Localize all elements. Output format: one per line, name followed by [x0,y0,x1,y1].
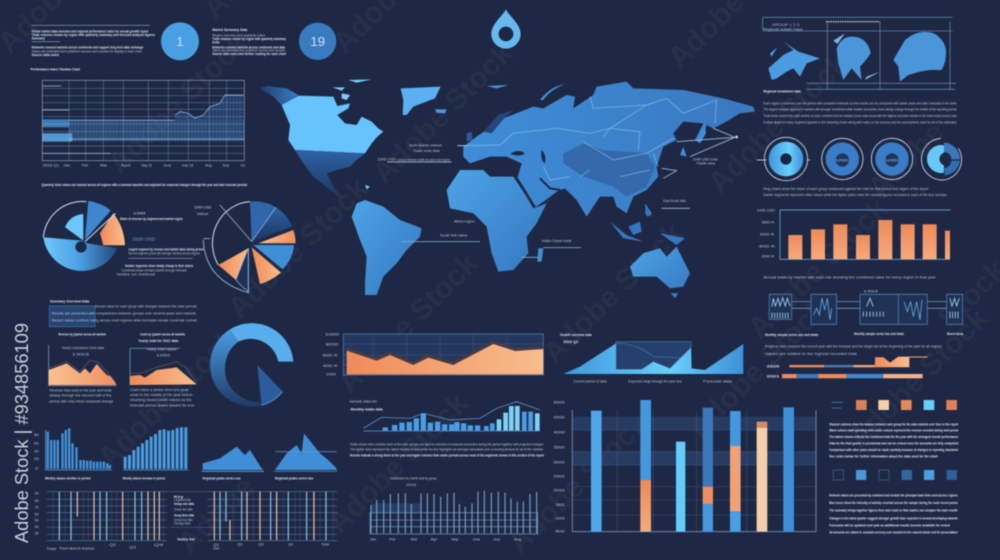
text block: intro right: Networks connect markets across continents and data [212,45,285,49]
text block: pie notes: 1929 USD [132,236,156,241]
area chart: right orange: returning toward lower values as the [130,398,192,402]
icon: circle badge 1: 1 [176,34,184,49]
map region: north america [260,79,383,199]
text block: pie notes: Second segment grows with stronger demand across regions [128,251,200,255]
grid chart: left lines: 30 [35,531,39,535]
text block: pie notes: Combined share remains stable through forecast [122,269,187,273]
watermarks: Adobe Stock [702,47,855,200]
text block: donut notes: Darker segments represent older values while the lighter parts mark the newest figures recorded in each of the four surveys [763,193,947,197]
grid chart: left lines: 50 [35,519,39,523]
line chart: grid timeline [42,80,246,168]
stacked bar chart [553,400,816,534]
grid chart: left lines: Period values for all groups [59,546,95,550]
watermarks: Adobe Stock [842,302,995,455]
line chart: grid timeline: Oc [241,164,246,168]
text block: intro left: Networks connect markets across continents and support long term data exchange [32,46,143,50]
bar chart: right blue [123,427,188,480]
grid chart: right lines: Sum [213,546,220,550]
area chart: wide orange: 1000 [325,332,339,336]
text block: legend notes two: Blue tones show the intensity of activity recorded across the sample during the most recent period [829,501,958,505]
area chart: right orange: Costs follow a similar trend and peak [130,388,189,392]
watermarks: Adobe Stock [322,387,475,540]
area chart: left orange: steady through the second half of the [49,394,112,398]
text block: notes: Progress bars compare the current year with the forecast and the target set at the beginning of the plan for all regions [765,345,942,349]
area chart: right orange: Yearly chart values [147,348,177,352]
line chart: grid timeline: Aug [205,164,212,168]
icon: circle badge 1 [161,22,199,60]
panel: bottom right [553,400,959,534]
area chart: wide blue: Expected range through the year end [628,379,682,383]
caption: Quarterly index values are tracked across all regions with a common baseline and adjusted for seasonal changes through the year and later forecast periods [42,183,247,187]
donut 2: USD [836,158,850,162]
watermarks: Adobe Stock [537,217,690,370]
stacked bar chart: 2000 [553,488,565,492]
map labels and callout arrows: Linked network traffic by year and region [397,158,450,162]
icon: location pin [491,9,521,49]
mini charts: five sparkline boxes [765,289,964,337]
map crops: three regions: GROUP 1 2 3 [772,22,800,27]
watermarks: Adobe Stock [682,292,835,445]
watermarks: Adobe Stock [92,322,245,475]
legend: cool squares [833,470,957,480]
area chart: left orange: Yearly comparison chart data [62,346,104,350]
text block: legend notes one: Warm colours mark spending while cooler colours represent the revenue recorded during each period [829,429,958,433]
text block: center notes: Totals shown here combine each of the main groups and give an overview of seasonal movement during the period together with projected changes [350,442,544,446]
text block: intro right: Values are estimated from published sources and rounded [212,49,285,53]
grid chart: right lines [207,492,337,550]
area chart: right orange: 1950 [156,354,170,358]
bar chart: center small: Monthly totals data [351,408,383,412]
line chart: grid timeline: 2018 Q1 [43,164,60,168]
text block: donut notes: Ring charts show the share of each group measured against the total for that period and region of the report [763,187,928,191]
watermarks: Adobe Stock [502,407,655,560]
area chart: blue mountains left [202,447,264,480]
text block: grid legend: Group three data [174,514,194,518]
area chart: left orange: Revenue rises early in the year and holds [49,389,112,393]
text block: paragraph: Each region is reviewed over the period with consistent methods so that results can be compared with earlier years and later forecasts in the table [763,101,957,105]
bar chart: left blue: Weekly values decline in period [45,476,91,480]
text block: paragraph: Trade flows connect the main centres on each continent and the shaded zones mark areas with the highest recorded volume in the most recent survey data [763,114,957,118]
map region: southeast asia islands [610,205,685,245]
grid chart: left lines: 60 [35,512,39,516]
map: world [260,79,755,298]
line chart: grid timeline: May 18 [142,164,152,168]
map crops: three regions [763,17,956,94]
area chart: right orange: Yearly total for 2021 data [138,339,178,343]
donut charts: four rings [757,137,962,181]
text block: legend notes one: Stacked columns show the balance between each group for the main markets over time in this report [829,422,959,426]
bar chart: center small: Sample data set [349,400,377,404]
watermarks: Adobe Stock [222,172,375,325]
pie chart: right: 1999 USD [194,204,211,209]
area chart: wide orange: 400 K [323,364,339,368]
bar chart: orange bars: 600 K [760,232,776,236]
line chart: grid timeline: April [121,164,131,168]
line chart: grid timeline: Sep [223,164,229,168]
text block: legend notes two: All amounts are stated in constant currency and rounded to the nearest whole unit for presentation [829,530,958,534]
stacked bar chart: 4000 [553,431,565,435]
text block: pie notes [117,211,203,276]
watermarks: Adobe Stock [742,192,895,345]
grid chart: right lines: Q2 [237,542,243,546]
stacked bar chart: 500 [555,530,565,534]
line chart: grid timeline: Feb [82,164,88,168]
text block: pie notes: Smaller segments show steady change in their shares [125,264,193,268]
text box: Recent values continue rising across most regions while forecasts remain moderate overall [52,318,197,322]
area chart: right orange: close to the middle of the year before [130,393,193,397]
map labels and callout arrows: North Atlantic network [409,144,442,148]
legend: warm squares [832,400,957,410]
text block: grid legend: Key [174,495,184,499]
donut 1 [757,137,810,181]
map labels and callout arrows: South link value [440,234,467,238]
mini charts: five sparkline boxes: Monthly sample series two and totals [854,332,904,336]
text block: legend notes one: Data for the final quarter is provisional and can be revised once the accounts are fully completed [829,441,958,445]
panel: right column [757,17,964,379]
grid chart: left lines: Q3 [129,546,136,550]
stacked bar chart: 4500 [553,415,565,419]
text block: grid legend: Notes list [177,538,196,542]
spike chart: 2018 [406,483,416,487]
text block: center notes: Results indicate a strong finish to the year and higher volumes than earlier periods across most of the segments shown in this section of the report [350,453,545,457]
text block: center notes: The lighter bars represent the latest months of data while the line highlights an average calculated over a moving window for all of the markets [350,448,544,452]
bar chart: left blue: 20 [34,457,39,461]
text block: donut notes [763,187,947,197]
area chart: wide orange: 200 [326,373,336,377]
text box [49,299,197,327]
progress bars: 2020 [767,364,780,368]
grid chart: left lines: 90 [35,492,39,496]
map region: iceland and svalbard [435,85,508,113]
chart label: Performance Index Timeline Chart [31,67,81,71]
line chart: grid timeline: Jan [63,164,70,168]
text block: pie notes: Largest segment by revenue and market value during period [128,247,203,251]
text block: intro left: Values are estimated from published sources and rounded for display in each chart [32,50,142,54]
map labels and callout arrows: Pacific area [697,162,715,166]
spike chart: Jan [370,538,376,542]
text block: intro right: Market Summary Data [212,28,247,32]
bar chart: left blue: 0 [35,466,38,470]
mini charts: five sparkline boxes: Monthly sample series one and totals [765,333,818,337]
map crops: three regions: Regional breakdown data [763,90,801,94]
mini charts: five sparkline boxes: Series [947,332,964,336]
grid chart: left lines: 70 [35,505,39,509]
stacked bar chart: 3000 [553,460,565,464]
text block: intro right: Info [212,40,220,44]
panel: lower left [34,299,337,551]
pie chart: left [43,201,125,271]
text block: pie notes: 1999 [133,211,147,216]
stacked bar chart: 2500 [553,474,565,478]
spike chart [370,477,538,542]
map region: africa [447,170,547,272]
bar chart: orange bars: 200 K [761,255,776,259]
map labels and callout arrows: 1995 USD [377,158,396,162]
map labels and callout arrows: Africa region [454,220,475,224]
text block: legend notes one: Comparison with other years should be made carefully because of changes in reporting standards [829,448,958,452]
text block: legend notes one: See notes below for further information about the data used for the chart [829,454,938,458]
map region: australia [630,247,690,298]
map region: greenland [401,87,441,115]
area chart: wide blue: Forecast data [703,379,732,383]
text block: intro right: Region overview and quarterly notes [212,33,265,37]
area chart: wide blue: 2019 Q1 [563,340,578,344]
text block: grid legend: Group five [174,521,191,525]
donut 2 [822,138,863,180]
line chart: grid timeline: June [163,164,171,168]
watermarks: Adobe Stock [332,247,485,400]
grid chart: left lines: Total [47,547,56,551]
panel: center lower [323,332,743,542]
area chart: right orange: forecast period draws toward its end [130,403,194,407]
spike chart: Aug [514,538,521,542]
text block: pie notes: Share of revenue by segment and market region [120,217,183,221]
text block: intro left: Global market data overview and regional performance index for annual growth report [32,30,149,34]
map labels and callout arrows: 1995 USD total [693,158,718,162]
grid chart: right lines: Q4 [288,542,293,546]
mini charts: five sparkline boxes: 1994 [863,289,879,294]
area chart: left orange [49,333,117,403]
bar chart: orange bars: 400 K [759,244,777,248]
text block: legend notes two: Changes in the latest quarter suggest stronger growth than expected in several developing markets [829,516,958,520]
spike chart: July [493,538,500,542]
pie chart: right [194,201,296,293]
stacked bar chart: 1000 [555,517,565,521]
spike chart: June [473,538,480,542]
watermarks: Adobe [862,116,951,205]
area chart: right orange: Costs by Quarter across all markets [140,332,185,336]
watermarks: Adobe Stock [367,37,520,190]
bar chart: left blue [34,428,112,480]
area chart: left orange: 1993 [72,353,89,357]
text block: grid legend: Group two data [174,508,193,512]
text block: intro right: Source data notes and further reading for each chart [212,52,287,56]
text block: notes [765,345,942,356]
watermarks: Adobe Stock [497,87,650,240]
spike chart: Feb [389,538,395,542]
progress bars: 2021 [767,375,780,379]
bar chart: orange bars: 1000 USD [757,208,776,212]
grid chart: left lines: Q4 [154,543,164,547]
grid chart: right lines: Total [321,542,329,546]
area chart: blue mountains right: Regional peaks series two [275,476,313,480]
grid chart: left lines: 40 [35,525,39,529]
text block: intro right: Trade volumes shown by region with quarterly summary [212,37,286,41]
map region: madagascar [537,248,543,262]
map labels and callout arrows: Trade route links [413,149,440,153]
grid chart: right lines: Q1 [213,543,219,547]
text block: legend notes two [829,493,958,534]
text block: legend notes two: Network values are presented by continent and include the principal trade links used across regions [829,493,958,497]
bar chart: orange bars [757,208,951,259]
stacked bar chart: 5000 [553,401,565,405]
donut: large [210,323,293,407]
text box: Summary Overview Data [50,299,89,303]
donut 3 [871,138,913,180]
text block: grid legend: Group four data [174,518,193,522]
text block: intro left: Summary [32,36,45,40]
stacked bar chart: 3500 [553,446,565,450]
area chart: wide blue [560,333,743,383]
bar chart: right blue: Weekly values increase in period [123,476,165,480]
text block: paragraph [763,101,957,125]
spike chart: May [452,538,459,542]
area chart: left orange: period with only minor seasonal change [49,399,113,403]
grid chart: left lines: Q2 [109,543,116,547]
area chart: wide orange: 800 [326,342,339,346]
text block: paragraph: The largest increase appears in markets with stronger investment while smaller economies show steady change through the middle of the reporting period [763,107,957,111]
text block: intro left [32,25,155,57]
donut 3: USD [886,158,899,162]
grid chart: left lines [35,492,167,551]
text block: intro left: Source data notes [32,53,59,57]
text block: intro right [212,28,287,56]
caption: Annual totals by market with each bar showing the combined value for every region in that year [763,276,937,280]
area chart: wide orange: 600 K [323,353,339,357]
text block: notes: Values are relative to the highest recorded total [765,352,857,356]
text block: legend notes two: The summary brings together figures from each chart so that readers can compare the main results [829,508,958,512]
area chart: blue mountains left: Regional peaks series one [203,476,241,480]
area chart: wide blue: Growth overview data [560,333,592,337]
icon: circle badge 19: 19 [310,34,325,49]
watermarks: Adobe Stock [102,27,255,180]
panel: top left and pies [31,22,336,293]
map labels and callout arrows: East Route data [663,199,686,203]
area chart: left orange: Revenue by Quarter across all markets [58,333,106,337]
grid chart: right lines: Q3 [258,542,264,546]
text block: pie notes: Notes on method [117,272,155,276]
map labels and callout arrows [377,128,738,257]
text block: center notes [350,442,545,457]
map crops: three regions: Regional subset maps [763,28,803,32]
map region: eurasia [463,82,755,217]
area chart: blue mountains right [274,433,337,480]
text block: legend notes one: The tallest column reflects the combined total for the year with the strongest overall performance [829,435,958,439]
text block: legend notes two: Forecasts will be updated next year as additional results become available for review [829,523,950,527]
line chart: grid timeline: July 18 [182,164,193,168]
bar chart: left blue: 60 [34,442,39,446]
spike chart: Apr [431,538,438,542]
map labels and callout arrows: Indian Ocean trade [542,239,572,243]
donut 4 [921,138,962,180]
watermarks: Adobe [172,471,261,560]
stacked bar chart: 1500 [555,503,565,507]
map region: south america [352,200,422,295]
area chart: wide orange [323,332,543,377]
text block: grid legend: Group one data [174,502,194,506]
text box: Annual value for each group with changes between the main periods [95,304,197,308]
vertical stock label: Adobe Stock | #934856109 [12,323,32,543]
bar chart: left blue: 40 [34,450,39,454]
text block: grid legend: Legend list [174,498,191,502]
bar chart: left blue: 80 [34,433,39,437]
text block: paragraph: Further detail for every segment appears in the following charts along with notes on the sources and the assumptions used for all of the estimates [763,121,957,125]
progress bars [767,357,928,379]
bar chart: orange bars: 800 K [762,220,776,224]
text block: grid legend [167,492,207,542]
icon: circle badge 19 [299,23,336,60]
pie chart: right: Value [197,212,209,216]
line chart: grid timeline: Mar [100,164,108,168]
text box: Results are presented with comparisons between groups over several years and markets [52,312,196,316]
text block: intro left: Trade volumes shown by region with quarterly summary and forecast analysis figures [32,33,155,37]
area chart: right orange [130,332,197,407]
bar chart: center small [349,400,540,431]
spike chart: Mar [411,538,418,542]
grid chart: left lines: 80 [35,499,39,503]
spike chart: Distribution by month and by group [390,477,437,481]
text block: legend notes one [829,422,959,458]
area chart: wide blue: Current period of data [573,379,607,383]
